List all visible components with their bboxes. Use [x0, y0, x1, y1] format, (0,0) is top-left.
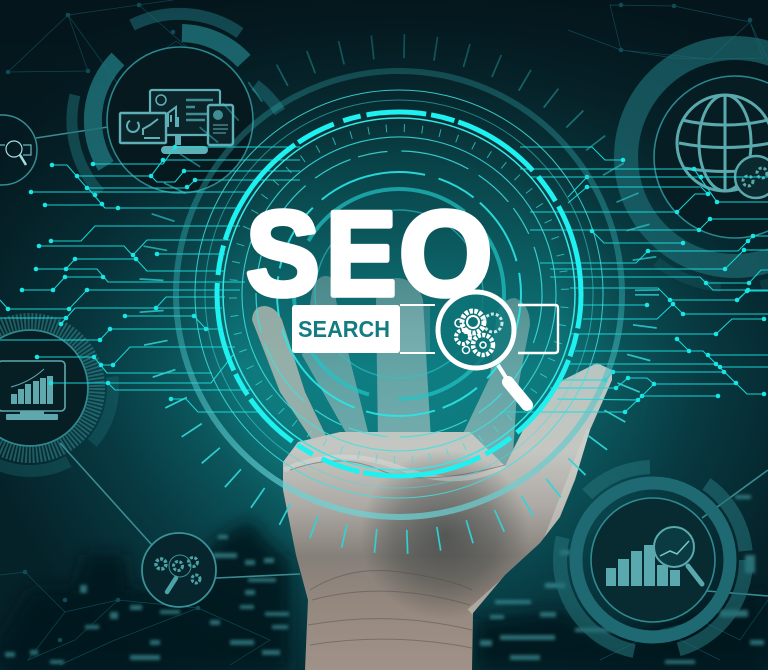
title: SEO: O	[399, 187, 492, 321]
hand	[252, 276, 612, 670]
finger: ring	[302, 276, 370, 440]
connector lines between circles	[60, 443, 768, 596]
title: SEO	[246, 187, 492, 321]
icon: magnifying glass with gears	[438, 292, 527, 405]
palm shading	[284, 430, 590, 648]
finger: middle	[376, 278, 431, 440]
icon: magnifier with gears	[156, 555, 200, 592]
title: SEO: S	[246, 188, 320, 321]
panel: analytics circle bottom-right	[560, 467, 746, 653]
icon: monitor with bars	[0, 361, 65, 420]
circuit nodes right	[585, 158, 766, 414]
panel: chart circle left	[0, 305, 113, 471]
icon: desktop monitor	[150, 90, 220, 154]
finger: index	[460, 298, 530, 470]
search label: SEARCH	[298, 316, 390, 342]
icon: tablet	[208, 105, 233, 145]
holographic rings	[169, 64, 629, 524]
circuit lines right	[500, 147, 768, 412]
title: SEO: E	[326, 187, 396, 320]
icon: laptop	[120, 113, 166, 143]
panel: devices circle	[72, 14, 280, 193]
circuit nodes left	[6, 145, 208, 401]
circuit lines left	[0, 147, 300, 412]
icon: globe	[677, 95, 768, 198]
blurred city skyline	[0, 495, 768, 670]
palm and thumb	[283, 363, 612, 670]
finger: little	[252, 306, 328, 440]
search bar	[292, 305, 558, 353]
icon: far-left search circle	[0, 115, 108, 185]
icon: bar chart with magnifier	[606, 527, 702, 586]
panel: globe circle	[604, 26, 768, 288]
panel: gears circle bottom-left	[142, 533, 216, 607]
holographic ticks and outer ring	[151, 46, 647, 542]
